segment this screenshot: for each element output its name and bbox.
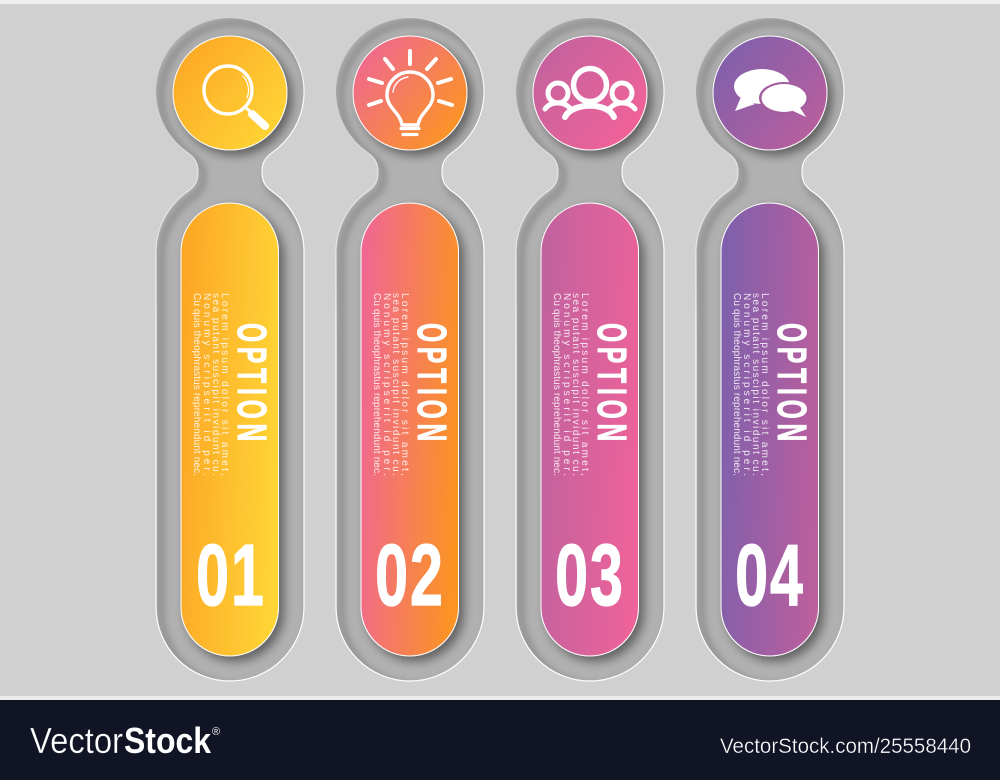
icon disc 02 (353, 36, 467, 150)
panel: option 04 (696, 18, 849, 686)
number 03: 03 (555, 527, 625, 624)
panel: option 02 (336, 18, 489, 686)
body text 02: sea putant suscipit invidunt cu. (390, 293, 401, 476)
capsule 04 (721, 203, 818, 656)
body text 03 (551, 293, 590, 476)
cut-out recess 04 (696, 18, 849, 686)
footer bar (0, 700, 1000, 780)
heading: option 02: OPTION (408, 323, 454, 446)
icon disc 03 (533, 36, 647, 150)
icon: speech bubbles (734, 69, 809, 117)
body text 04: sea putant suscipit invidunt cu. (750, 293, 761, 476)
body text 01: sea putant suscipit invidunt cu. (210, 293, 221, 476)
icon: light bulb (369, 51, 452, 134)
panel: option 01 (156, 18, 309, 686)
body text 01: Nonumy scripserit id per. (201, 293, 212, 476)
heading: option 03: OPTION (588, 323, 634, 446)
body text 04: Nonumy scripserit id per. (741, 293, 752, 476)
icon: magnifying glass (204, 66, 265, 126)
heading: option 04: OPTION (768, 323, 814, 446)
heading: option 01: OPTION (228, 323, 274, 446)
capsule 01 (181, 203, 278, 656)
body text 04: Cu quis theophrastus reprehendunt nec. (731, 293, 742, 476)
body text 01: Cu quis theophrastus reprehendunt nec. (191, 293, 202, 476)
image id: VectorStock.com/25558440 (720, 735, 971, 758)
capsule 02 (361, 203, 458, 656)
body text 03: Nonumy scripserit id per. (561, 293, 572, 476)
number 04: 04 (735, 527, 805, 624)
body text 02: Lorem ipsum dolor sit amet, (399, 293, 410, 476)
capsule 03 (541, 203, 638, 656)
icon disc 01 (173, 36, 287, 150)
panel: option 03 (516, 18, 669, 686)
number 02: 02 (375, 527, 445, 624)
body text 01 (191, 293, 230, 476)
body text 04 (731, 293, 770, 476)
logo: VectorStock: Stock (124, 720, 212, 761)
cut-out recess 02 (336, 18, 489, 686)
body text 03: Cu quis theophrastus reprehendunt nec. (551, 293, 562, 476)
body text 02: Cu quis theophrastus reprehendunt nec. (371, 293, 382, 476)
body text 01: Lorem ipsum dolor sit amet, (219, 293, 230, 476)
icon: group of people (545, 68, 635, 117)
number 01: 01 (196, 527, 266, 624)
body text 02: Nonumy scripserit id per. (381, 293, 392, 476)
logo: VectorStock: ® (212, 726, 220, 738)
body text 02 (371, 293, 410, 476)
icon disc 04 (713, 36, 827, 150)
cut-out recess 01 (156, 18, 309, 686)
logo: VectorStock (30, 720, 220, 761)
cut-out recess 03 (516, 18, 669, 686)
body text 04: Lorem ipsum dolor sit amet, (759, 293, 770, 476)
logo: VectorStock: Vector (30, 720, 123, 761)
body text 03: sea putant suscipit invidunt cu. (570, 293, 581, 476)
body text 03: Lorem ipsum dolor sit amet, (579, 293, 590, 476)
